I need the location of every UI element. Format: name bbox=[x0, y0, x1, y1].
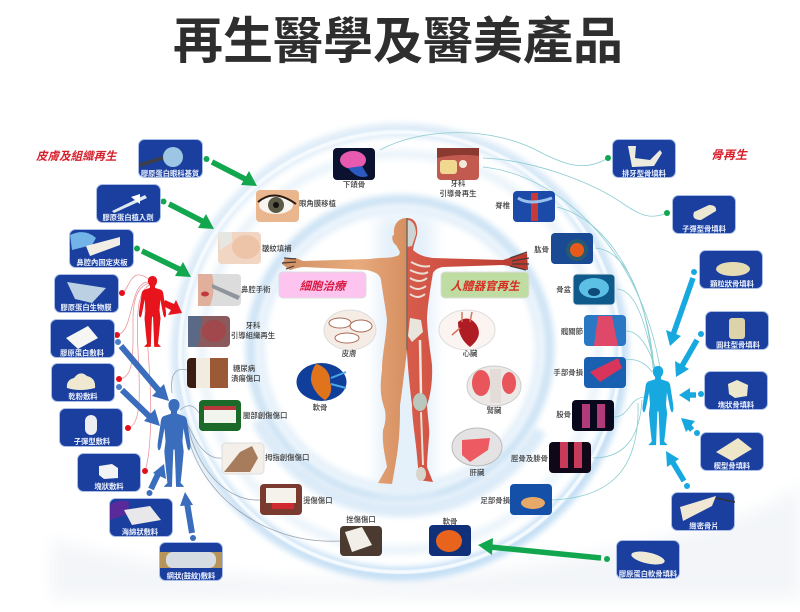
thumbnail: pelvis bbox=[573, 274, 615, 305]
thumbnail: cartilage bbox=[429, 525, 471, 556]
label: tibia and fibula: 脛骨及腓骨 bbox=[511, 454, 548, 463]
arrow: cyan to right figure 3 bbox=[679, 388, 704, 402]
label: cartilage lower: 軟骨 bbox=[443, 517, 457, 526]
label: diabetic ulcer wound: 潰瘍傷口 bbox=[231, 374, 261, 383]
arrow: green 3 bbox=[134, 246, 191, 277]
panel: cell therapy: 細胞治療 bbox=[300, 280, 348, 293]
product: block dressing bbox=[78, 454, 140, 492]
arrow: blue to left figure 2 bbox=[116, 384, 160, 426]
product: block bone filler: 塊狀骨填料 bbox=[718, 400, 755, 410]
figure: blue person left bbox=[158, 399, 190, 487]
label: leg trauma wound: 腿部創傷傷口 bbox=[243, 411, 287, 420]
heading: bone regeneration: 骨再生 bbox=[711, 148, 748, 162]
arrow: green 1 bbox=[204, 156, 257, 186]
product: bullet dressing bbox=[60, 408, 122, 446]
product: cortical bone chip: 緻密骨片 bbox=[689, 522, 719, 530]
organ: heart bbox=[439, 310, 495, 350]
product: sponge dressing: 海綿狀敷料 bbox=[122, 528, 159, 536]
label: hip joint: 髖關節 bbox=[561, 327, 584, 336]
thumbnail: brain bbox=[333, 148, 375, 180]
thumbnail: femur bbox=[572, 400, 614, 431]
label: thumb trauma wound: 拇指創傷傷口 bbox=[265, 453, 309, 462]
organ: liver bbox=[452, 428, 502, 466]
thumbnail: foot bbox=[510, 484, 552, 515]
label: kidney: 腎臟 bbox=[487, 406, 502, 415]
label: wrinkle filling: 皺紋填補 bbox=[262, 244, 292, 253]
product: mesh dressing: 網狀(鼓紋)敷料 bbox=[167, 572, 216, 580]
thumbnail: thumb wound bbox=[222, 443, 264, 474]
product: bullet bone filler bbox=[672, 196, 736, 234]
background rings bbox=[52, 130, 800, 598]
product: collagen implant bbox=[96, 184, 160, 222]
label: dental guided tissue regeneration bbox=[231, 321, 276, 340]
human anatomy figure bbox=[282, 218, 529, 484]
label: diabetic ulcer wound bbox=[231, 364, 261, 383]
thumbnail: diabetic ulcer bbox=[187, 358, 228, 388]
label: cartilage: 軟骨 bbox=[313, 403, 327, 412]
label: burn wound: 燙傷傷口 bbox=[303, 496, 333, 505]
red dots bbox=[114, 290, 148, 474]
product: cylinder bone filler: 圓柱型骨填料 bbox=[716, 340, 761, 350]
product: collagen dressing: 膠原蛋白敷料 bbox=[60, 348, 105, 358]
label: contusion wound: 挫傷傷口 bbox=[346, 515, 376, 524]
thumbnail: burn wound bbox=[260, 484, 302, 515]
label: skin: 皮膚 bbox=[342, 349, 356, 358]
thumbnail: dental tissue bbox=[188, 316, 230, 347]
product: bullet dressing: 子彈型敷料 bbox=[74, 437, 111, 446]
product: collagen ophthalmic matrix: 膠原蛋白眼科基質 bbox=[141, 169, 199, 178]
thumbnail: leg wound bbox=[199, 400, 241, 431]
label: dental guided tissue regeneration: 引導組織再生 bbox=[231, 331, 276, 340]
thumbnail: hip joint bbox=[584, 315, 626, 346]
product: cylinder bone filler bbox=[706, 312, 768, 350]
arrow: cyan to right figure 2 bbox=[675, 331, 704, 377]
arrow: blue to left figure 3 bbox=[146, 464, 166, 496]
label: humerus: 肱骨 bbox=[534, 245, 549, 254]
arrow: green 2 bbox=[160, 198, 214, 229]
panel: cell therapy bbox=[279, 272, 366, 298]
product: dry powder dressing: 乾粉敷料 bbox=[68, 392, 98, 401]
label: dental guided bone regeneration: 引導骨再生 bbox=[440, 189, 477, 198]
label: dental guided bone regeneration bbox=[440, 179, 477, 198]
label: hand bone injury: 手部骨損 bbox=[553, 368, 584, 377]
connector lines: red bbox=[117, 275, 152, 471]
product: collagen implant: 膠原蛋白植入劑 bbox=[102, 213, 154, 222]
label: cornea transplant: 眼角膜移植 bbox=[299, 199, 337, 208]
arrow: cyan to right figure 1 bbox=[666, 269, 697, 346]
green dots bbox=[605, 155, 670, 216]
arrow: red block bbox=[163, 300, 182, 315]
label: dental guided tissue regeneration: 牙科 bbox=[246, 321, 261, 330]
organ: knee cartilage bbox=[296, 363, 346, 401]
thumbnail: hand bbox=[584, 357, 626, 388]
thumbnail: eye bbox=[256, 190, 299, 222]
thumbnail: tibia and fibula bbox=[549, 442, 591, 473]
label: spine: 脊椎 bbox=[495, 201, 511, 210]
product: collagen biomembrane: 膠原蛋白生物膜 bbox=[60, 303, 112, 312]
product: wedge bone filler: 楔型骨填料 bbox=[714, 462, 751, 470]
label: diabetic ulcer wound: 糖尿病 bbox=[233, 364, 256, 373]
product: nasal splint: 鼻腔內固定夾板 bbox=[76, 258, 128, 267]
product: block bone filler bbox=[704, 372, 768, 410]
product: collagen cartilage filler bbox=[616, 540, 680, 578]
title: 再生醫學及醫美產品 bbox=[173, 14, 623, 70]
arrow: green cartilage bbox=[478, 538, 610, 562]
product: collagen biomembrane bbox=[54, 274, 118, 312]
product: granule bone filler: 顆粒狀骨填料 bbox=[710, 280, 755, 288]
label: femur: 股骨 bbox=[556, 410, 571, 419]
product: dry powder dressing bbox=[52, 364, 114, 402]
arrow: cyan to right figure 4 bbox=[681, 418, 700, 436]
product: collagen cartilage filler: 膠原蛋白軟骨填料 bbox=[619, 570, 678, 578]
connector lines: bone side bbox=[380, 133, 667, 500]
product: nasal splint bbox=[70, 230, 134, 268]
arrow: blue to left figure 4 bbox=[180, 492, 196, 541]
figure: cyan person right bbox=[643, 366, 673, 445]
panel: organ regeneration: 人體器官再生 bbox=[450, 280, 521, 293]
label: foot bone injury: 足部骨損 bbox=[480, 496, 511, 505]
figure: red person bbox=[139, 276, 166, 347]
thumbnail: tooth bbox=[437, 148, 479, 180]
thumbnail: spine bbox=[513, 191, 555, 222]
product: mandible bone filler bbox=[612, 140, 676, 178]
heading: skin and tissue regeneration: 皮膚及組織再生 bbox=[36, 150, 118, 163]
arrow: blue to left figure 1 bbox=[115, 339, 169, 401]
thumbnail: contusion wound bbox=[340, 526, 382, 556]
thumbnail: humerus bbox=[551, 233, 593, 264]
connector lines: wound side bbox=[172, 369, 340, 541]
product: collagen ophthalmic matrix bbox=[138, 140, 202, 178]
product: block dressing: 塊狀敷料 bbox=[94, 482, 124, 491]
label: dental guided bone regeneration: 牙科 bbox=[451, 179, 466, 188]
label: liver: 肝臟 bbox=[470, 468, 485, 477]
product: granule bone filler bbox=[700, 250, 762, 288]
label: mandible: 下頜骨 bbox=[343, 180, 365, 189]
product: cortical bone chip bbox=[672, 492, 735, 530]
panel: organ regeneration bbox=[441, 272, 529, 298]
label: pelvis: 骨盆 bbox=[556, 285, 572, 294]
product: sponge dressing bbox=[110, 498, 172, 536]
product: bullet bone filler: 子彈型骨填料 bbox=[682, 224, 727, 234]
product: mandible bone filler: 排牙型骨填料 bbox=[622, 169, 667, 178]
product: mesh dressing bbox=[160, 542, 222, 580]
thumbnail: face wrinkle bbox=[218, 232, 261, 264]
arrow: cyan to right figure 5 bbox=[666, 451, 690, 489]
label: nasal surgery: 鼻腔手術 bbox=[241, 285, 271, 294]
label: heart: 心臟 bbox=[463, 349, 478, 358]
product: wedge bone filler bbox=[700, 432, 764, 470]
organ: kidney bbox=[467, 366, 521, 406]
product: collagen dressing bbox=[50, 320, 114, 358]
thumbnail: nasal surgery bbox=[198, 274, 241, 306]
organ: skin bbox=[324, 310, 376, 350]
